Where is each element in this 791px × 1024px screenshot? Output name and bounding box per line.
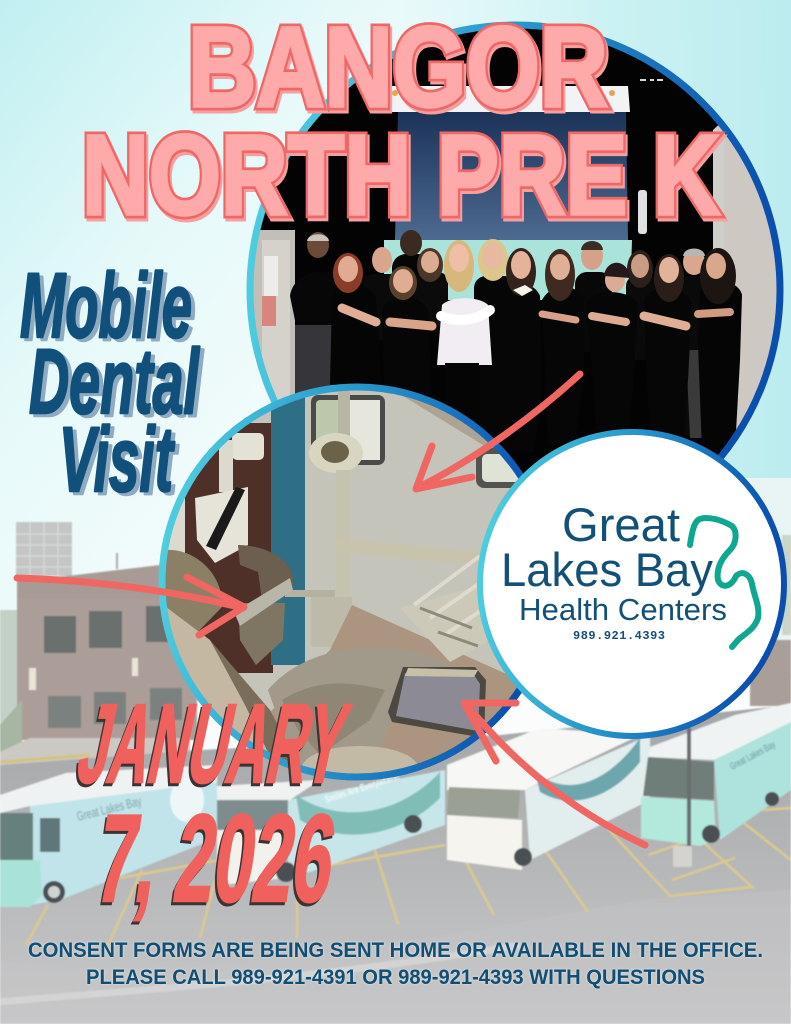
heading shadow [24, 258, 204, 514]
date text: 7, 2026 [89, 790, 344, 928]
operatory circle ring [162, 387, 552, 777]
floor [271, 605, 517, 764]
date shadow: JANUARY [67, 683, 357, 809]
team photo circle [246, 22, 784, 474]
date shadow [67, 683, 357, 931]
bus front [384, 80, 663, 300]
icon: teal Michigan shoreline [690, 518, 758, 647]
dental operatory photo circle [158, 384, 524, 780]
date: January 7, 2026 [67, 680, 359, 931]
logo wordmark: Lakes Bay [501, 543, 713, 596]
footer note [28, 939, 763, 989]
footer glow: PLEASE CALL 989-921-4391 OR 989-921-4393 WITH QUESTIONS [86, 966, 705, 989]
footer glow [28, 939, 763, 989]
bus 2 [217, 770, 445, 884]
arrow: pointing to operatory wall [416, 374, 580, 489]
bus 4 [641, 703, 791, 846]
team members back row [290, 230, 712, 440]
title: Bangor North Pre K [82, 4, 722, 241]
white disc [480, 432, 784, 736]
heading: Mobile Dental Visit [20, 255, 204, 514]
delivery arm [285, 470, 480, 647]
logo wordmark: Great [562, 498, 680, 551]
heading text: Visit [59, 409, 175, 511]
distant tower [16, 522, 118, 576]
logo phone number: 989.921.4393 [573, 629, 665, 643]
window [311, 395, 528, 488]
date shadow: 7, 2026 [87, 793, 342, 931]
heading text: Mobile [20, 255, 192, 357]
heading shadow: Mobile [24, 258, 196, 360]
footer text: PLEASE CALL 989-921-4391 OR 989-921-4393 WITH QUESTIONS [86, 966, 705, 989]
title line: BANGOR: BANGOR [190, 7, 610, 133]
heading text: Dental [29, 331, 200, 433]
date text: JANUARY [69, 680, 359, 806]
title line: BANGOR: BANGOR [188, 4, 608, 130]
date text [69, 680, 359, 928]
heading shadow: Dental [33, 334, 204, 436]
team photo contents [254, 28, 776, 474]
right building [750, 535, 791, 706]
bus 1 [0, 765, 217, 907]
arrow: pointing to chair arm [17, 577, 244, 635]
heading text [20, 255, 200, 511]
overhead light [309, 388, 363, 473]
headrest and arm pad [164, 545, 293, 665]
footer glow: CONSENT FORMS ARE BEING SENT HOME OR AVAILABLE IN THE OFFICE. [28, 939, 763, 962]
team circle ring [250, 25, 780, 555]
brick building [0, 565, 197, 765]
logo circle [480, 432, 784, 736]
logo wordmark: Health Centers [519, 592, 727, 627]
title line: BANGOR: BANGOR [188, 4, 608, 130]
parking lines [26, 808, 791, 945]
footer text: CONSENT FORMS ARE BEING SENT HOME OR AVAILABLE IN THE OFFICE. [28, 939, 763, 962]
wall x-ray unit [195, 433, 264, 563]
asphalt [0, 705, 791, 1024]
instrument tray [388, 667, 486, 738]
bus 3 [447, 728, 650, 870]
instrument holders [413, 554, 480, 662]
team members front row [330, 240, 742, 452]
background photo: building and parking lot with dental buses [0, 522, 791, 1024]
logo wordmark [501, 498, 727, 627]
footer text [28, 939, 763, 989]
dental chair [167, 608, 454, 774]
arrow: pointing to tray [464, 703, 645, 845]
operatory contents [166, 390, 518, 774]
bus 1: Great Lakes Bay [75, 793, 143, 824]
light pole [673, 728, 692, 867]
heading shadow: Visit [63, 412, 179, 514]
bus 2: Smiles Are Everywhere! [324, 771, 401, 806]
